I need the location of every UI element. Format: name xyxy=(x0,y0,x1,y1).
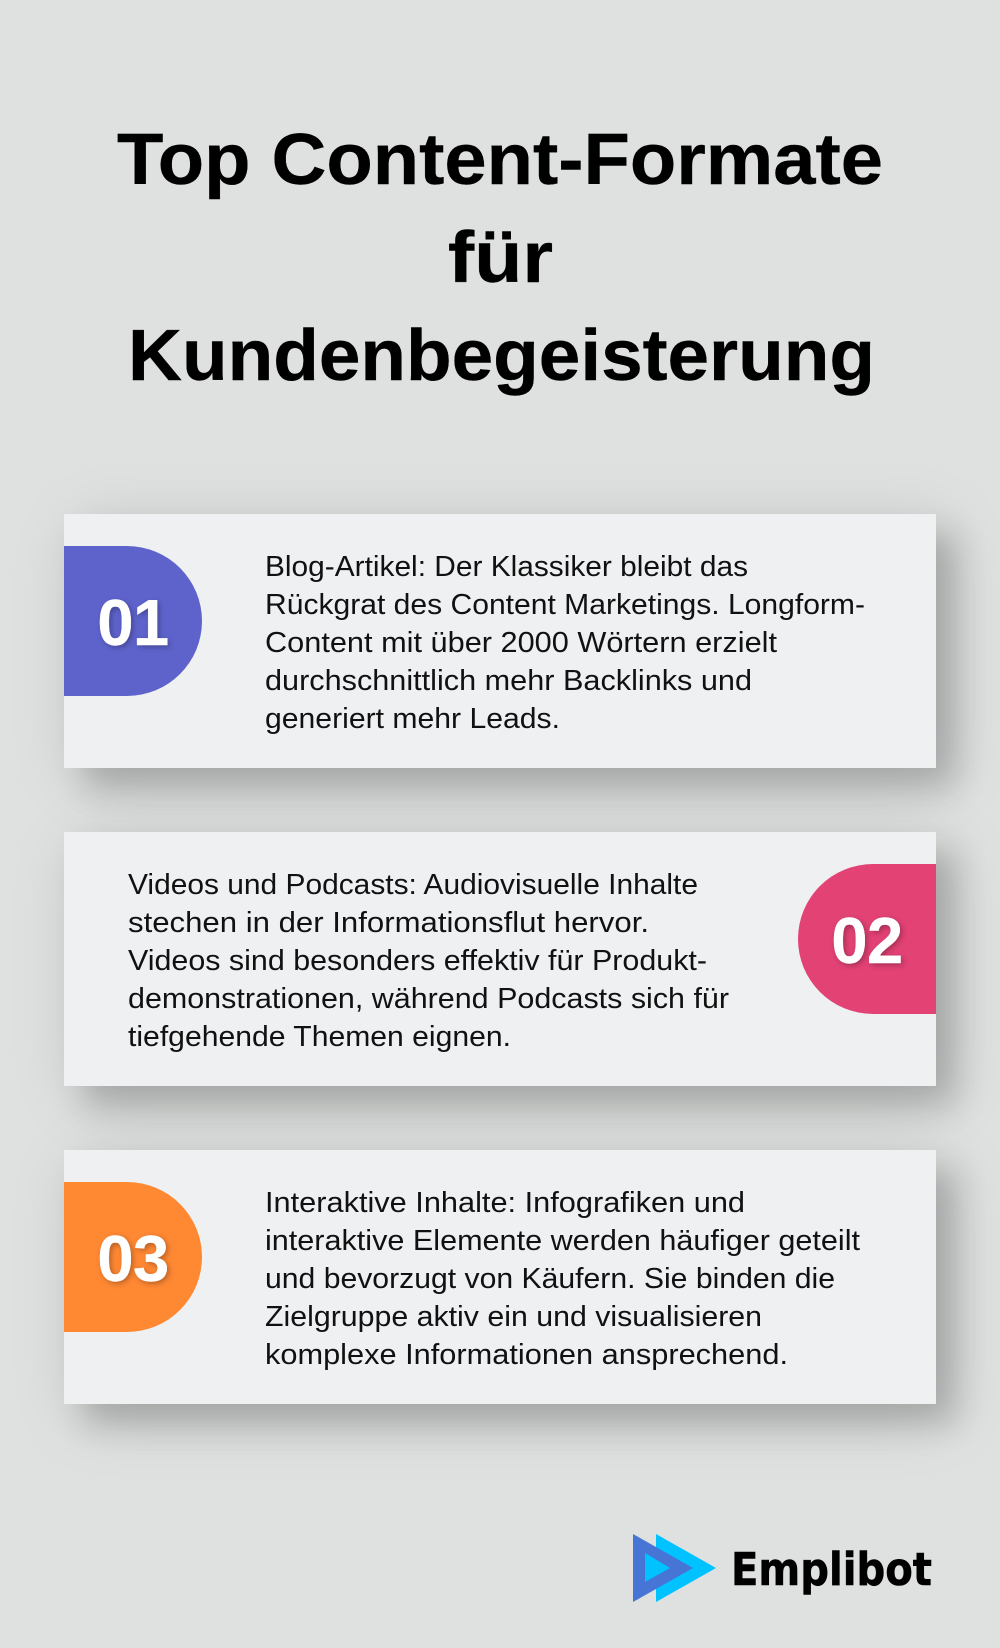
text: interactive content: und bevorzugt von Käufern. Sie binden die xyxy=(265,1263,835,1295)
text: videos and podcasts: stechen in der Informationsflut hervor. xyxy=(128,907,649,939)
badge 01 xyxy=(64,546,202,696)
text: blog articles: Content mit über 2000 Wörtern erzielt xyxy=(265,627,777,659)
text: videos and podcasts: tiefgehende Themen eignen. xyxy=(128,1021,511,1053)
text: interactive content: Zielgruppe aktiv ein und visualisieren xyxy=(265,1301,762,1333)
logo: Emplibot: Emplibot xyxy=(731,1543,932,1596)
panel: card 02 videos and podcasts xyxy=(64,832,936,1086)
badge 02: 02 xyxy=(831,904,903,977)
title xyxy=(117,120,883,396)
panel: card 03 interactive content xyxy=(64,1150,936,1404)
badge 03 xyxy=(64,1182,202,1332)
text: blog articles: Blog-Artikel: Der Klassiker bleibt das xyxy=(265,551,748,583)
text: interactive content: komplexe Informationen ansprechend. xyxy=(265,1339,788,1371)
text: blog articles: Rückgrat des Content Marketings. Longform- xyxy=(265,589,865,621)
text: videos and podcasts: Videos und Podcasts: Audiovisuelle Inhalte xyxy=(128,869,698,901)
title: Top Content-Formate xyxy=(117,120,883,200)
text: blog articles: durchschnittlich mehr Backlinks und xyxy=(265,665,752,697)
title: Kundenbegeisterung xyxy=(128,316,875,396)
text: blog articles: generiert mehr Leads. xyxy=(265,703,560,735)
badge 01: 01 xyxy=(97,586,169,659)
text: interactive content: interaktive Elemente werden häufiger geteilt xyxy=(265,1225,860,1257)
text: videos and podcasts xyxy=(128,869,729,1053)
title: für xyxy=(448,218,553,298)
text: interactive content xyxy=(265,1187,860,1371)
panel: card 01 blog articles xyxy=(64,514,936,768)
text: videos and podcasts: Videos sind besonders effektiv für Produkt- xyxy=(128,945,707,977)
badge 03: 03 xyxy=(97,1222,169,1295)
text: videos and podcasts: demonstrationen, während Podcasts sich für xyxy=(128,983,729,1015)
text: blog articles xyxy=(265,551,865,735)
text: interactive content: Interaktive Inhalte: Infografiken und xyxy=(265,1187,745,1219)
badge 02 xyxy=(798,864,936,1014)
